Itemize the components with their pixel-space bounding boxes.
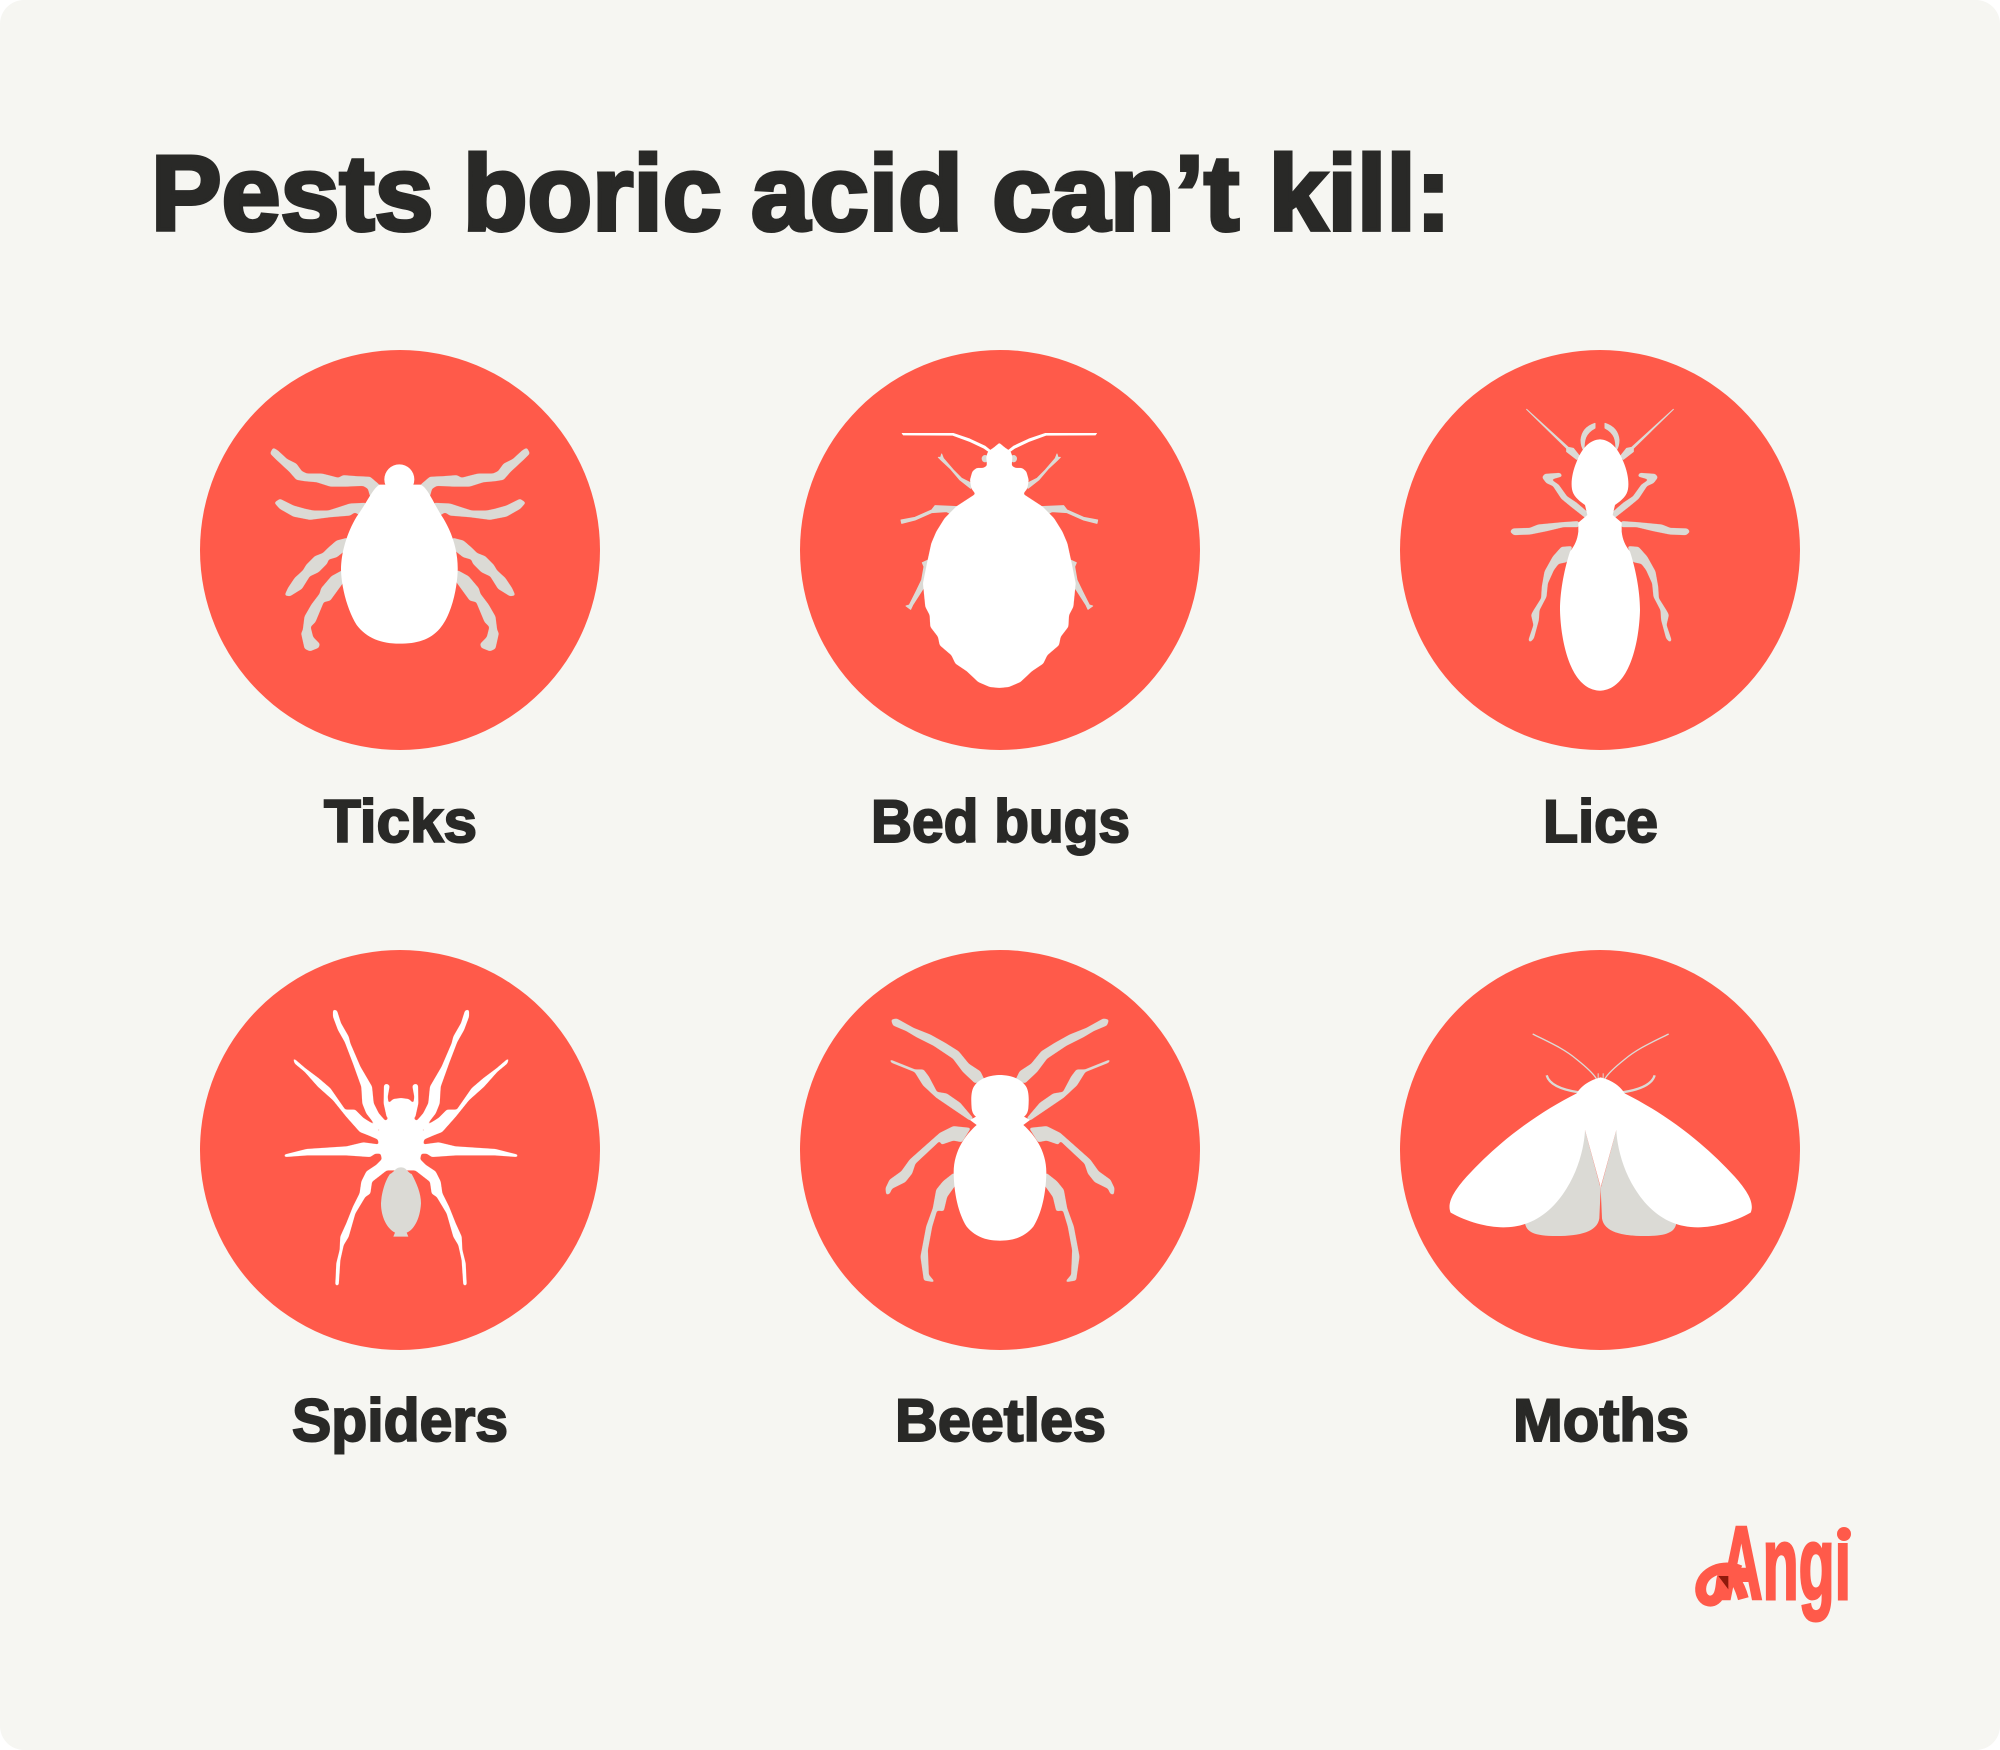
label: lice: Lice [1543,788,1658,855]
icon: moth in red circle [1400,950,1800,1350]
label: beetles: Beetles [895,1387,1106,1454]
icon: beetle in red circle [800,950,1200,1350]
logo: Angi: Angi [1720,1506,1851,1622]
icon: tick in red circle [200,350,600,750]
icon: bed bug in red circle [800,350,1200,750]
label: ticks: Ticks [324,788,477,855]
logo: Angi [1701,1506,1854,1622]
panel: spiders [200,950,600,1454]
label: bed bugs: Bed bugs [871,788,1130,855]
panel: moths [1400,950,1800,1454]
label: spiders: Spiders [292,1387,508,1454]
logo: ribbon loop [1701,1568,1743,1601]
panel: ticks [200,350,600,855]
panel: lice [1400,350,1800,855]
panel: bed bugs [800,350,1200,855]
icon: louse in red circle [1400,350,1800,750]
title: Pests boric acid can’t kill: [151,133,1451,253]
panel: beetles [800,950,1200,1454]
icon: spider in red circle [200,950,600,1350]
label: moths: Moths [1513,1387,1689,1454]
